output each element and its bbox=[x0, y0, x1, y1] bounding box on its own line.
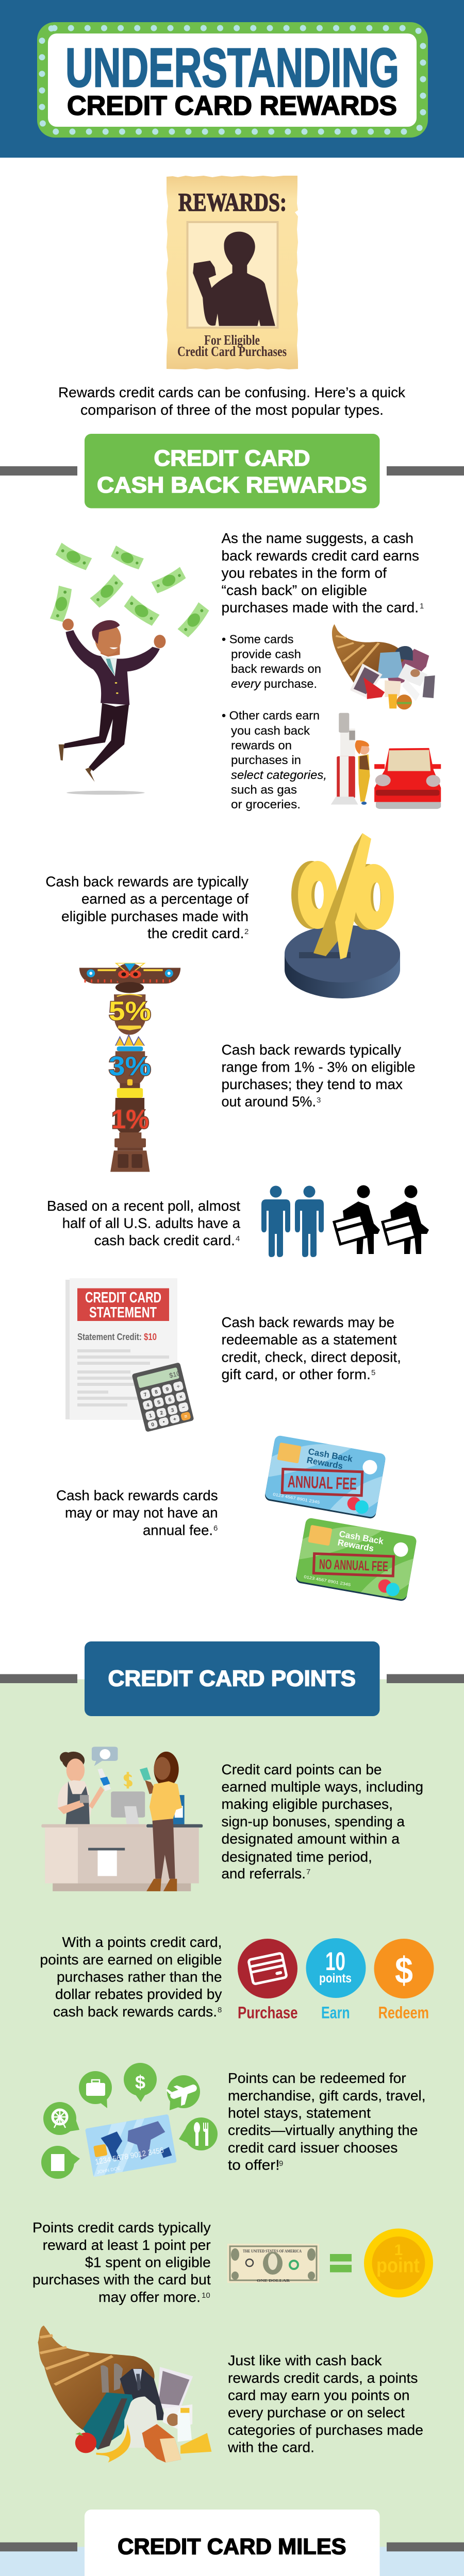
intro text bbox=[58, 384, 405, 418]
counter bbox=[41, 1824, 146, 1827]
text: points vs dollar rebates bbox=[40, 1934, 222, 2020]
calculator: 9 bbox=[165, 1386, 170, 1393]
icon: one point coin bbox=[364, 2229, 433, 2298]
header band bbox=[0, 0, 464, 158]
text: recent poll: half of all U.S. adults have a bbox=[62, 1215, 241, 1231]
icon: woman pumping gas into red car bbox=[331, 713, 441, 809]
section banner: miles: CREDIT CARD MILES bbox=[118, 2534, 346, 2560]
earn step: points bbox=[319, 1971, 352, 1986]
calculator: 7 bbox=[143, 1392, 147, 1398]
text: cash back definition: you rebates in the form of bbox=[222, 565, 387, 581]
panel: credit card points background bbox=[0, 1680, 464, 2547]
calculator: 5 bbox=[157, 1400, 161, 1406]
text: earning points: designated amount within a bbox=[222, 1831, 400, 1847]
text: points vs dollar rebates: purchases rather than the bbox=[57, 1969, 222, 1985]
wanted poster bbox=[167, 176, 298, 369]
bullet: select categories: • Other cards earn bbox=[222, 709, 320, 722]
icon: purchase earn redeem points bbox=[238, 1938, 434, 2022]
world map card: JOHN DOE bbox=[96, 2165, 121, 2175]
section banner: points: CREDIT CARD POINTS bbox=[108, 1666, 356, 1691]
text: annual fee: may or may not have an bbox=[65, 1505, 218, 1521]
text: typical range: Cash back rewards typically bbox=[222, 1042, 401, 1058]
text: annual fee: 6 bbox=[213, 1524, 218, 1533]
icon: credit card statement and calculator: STATEMENT bbox=[89, 1304, 157, 1321]
text: annual fee bbox=[56, 1487, 218, 1538]
text: percentage of purchases: earned as a percentage of bbox=[81, 891, 248, 907]
icon: credit card statement and calculator: CREDIT CARD bbox=[85, 1290, 161, 1306]
wanted poster: Credit Card Purchases bbox=[177, 344, 287, 359]
calculator: 4 bbox=[146, 1402, 150, 1409]
no annual fee stamp: NO ANNUAL FEE bbox=[319, 1556, 388, 1574]
text: points per dollar: reward at least 1 point per bbox=[43, 2237, 211, 2253]
purchase step: Purchase bbox=[238, 2004, 298, 2022]
icon: green no annual fee card: 0123 4567 8901 2345 bbox=[304, 1574, 352, 1587]
bullet: select categories: purchases in bbox=[231, 753, 301, 767]
section banner: miles bbox=[0, 2510, 464, 2576]
text: recent poll: 4 bbox=[236, 1234, 240, 1243]
redeem step: Redeem bbox=[378, 2004, 429, 2022]
text: points per dollar: $1 spent on eligible bbox=[85, 2255, 211, 2270]
bubble: dining bbox=[179, 2117, 218, 2150]
icon: four people, two holding cards bbox=[261, 1185, 429, 1257]
illustration: man jumping with falling money bbox=[50, 543, 210, 795]
falling bills bbox=[50, 543, 210, 638]
icon: blue annual fee card: Rewards bbox=[306, 1455, 343, 1471]
bubble: cash bbox=[124, 2063, 157, 2102]
bullet: every purchase: every purchase. bbox=[231, 677, 317, 690]
bubble: travel bbox=[165, 2075, 201, 2110]
text: cash back definition: 1 bbox=[420, 602, 424, 611]
text: cash back definition bbox=[222, 530, 424, 616]
text: redeeming points: 9 bbox=[279, 2159, 283, 2168]
poster frame bbox=[188, 222, 277, 328]
text: redeeming points: hotel stays, statement bbox=[228, 2105, 371, 2121]
text: every purchase or categories: card may earn you points on bbox=[228, 2387, 409, 2403]
text: redeeming points: credit card issuer chooses bbox=[228, 2140, 398, 2156]
text: percentage of purchases bbox=[45, 874, 248, 941]
redeem step bbox=[374, 1939, 434, 2022]
text: cash back definition: As the name suggests, a cash bbox=[222, 530, 413, 546]
text: redeemable forms: credit, check, direct deposit, bbox=[222, 1349, 401, 1365]
totem 5%: 5% bbox=[109, 996, 151, 1026]
marquee inner panel bbox=[48, 33, 417, 127]
bullet: select categories: you cash back bbox=[231, 724, 310, 737]
text: redeeming points: merchandise, gift cards, travel, bbox=[228, 2088, 426, 2104]
text: earning points: 7 bbox=[306, 1868, 310, 1876]
icon: credit card statement and calculator bbox=[65, 1278, 194, 1432]
text: cash back definition: purchases made with the card. bbox=[222, 600, 419, 616]
icon: totem pole with percentages bbox=[79, 963, 180, 1172]
icon: equals sign bbox=[330, 2254, 352, 2272]
text: earning points: making eligible purchases, bbox=[222, 1796, 393, 1812]
calculator: + bbox=[173, 1416, 177, 1422]
icon: 3D percent sign on pedestal bbox=[285, 833, 400, 998]
text: cash back definition: back rewards credit card earns bbox=[222, 548, 419, 564]
speech bubble bbox=[92, 1747, 118, 1766]
text: typical range: range from 1% - 3% on eligible bbox=[222, 1059, 416, 1075]
text: every purchase or categories bbox=[227, 2352, 423, 2455]
text: redeemable forms: redeemable as a statement bbox=[222, 1332, 397, 1348]
text: cash back definition: “cash back” on eligible bbox=[222, 582, 367, 598]
bullet: select categories: or groceries. bbox=[231, 798, 301, 811]
world map card bbox=[85, 2114, 177, 2177]
text: points vs dollar rebates: cash back rewards cards. bbox=[53, 2004, 217, 2020]
text: recent poll: Based on a recent poll, almost bbox=[47, 1198, 240, 1214]
calculator bbox=[131, 1362, 194, 1432]
text: typical range bbox=[222, 1042, 416, 1110]
bullet: every purchase bbox=[222, 633, 321, 690]
calculator: 6 bbox=[168, 1397, 172, 1403]
cashier bbox=[60, 1752, 72, 1763]
calculator: $10 bbox=[168, 1369, 181, 1380]
world map card: 1234 5678 9012 3456 bbox=[94, 2146, 164, 2166]
person without card bbox=[261, 1186, 290, 1257]
calculator: • bbox=[162, 1419, 165, 1425]
text: points vs dollar rebates: With a points credit card, bbox=[62, 1934, 222, 1950]
statement credit line: Statement Credit: $10 bbox=[77, 1332, 157, 1342]
intro text: comparison of three of the most popular types. bbox=[80, 402, 384, 418]
text: every purchase or categories: every purchase or on select bbox=[228, 2404, 405, 2420]
totem 3%: 3% bbox=[109, 1052, 151, 1081]
icon: dollar bill: ONE DOLLAR bbox=[257, 2279, 290, 2283]
section banner: cash back: CASH BACK REWARDS bbox=[97, 472, 367, 498]
text: redeemable forms bbox=[222, 1314, 401, 1382]
poster caption: For Eligible bbox=[204, 332, 260, 348]
text: redeemable forms: Cash back rewards may be bbox=[222, 1314, 394, 1330]
text: earning points: and referrals. bbox=[222, 1866, 306, 1882]
icon: one point coin: 1 bbox=[394, 2242, 403, 2259]
text: annual fee: annual fee. bbox=[143, 1522, 213, 1538]
intro text: Rewards credit cards can be confusing. Here’s a quick bbox=[58, 384, 405, 400]
subtitle: CREDIT CARD REWARDS bbox=[67, 91, 397, 121]
icon: green no annual fee card: Rewards bbox=[337, 1537, 374, 1553]
calculator: − bbox=[181, 1404, 186, 1411]
text: typical range: purchases; they tend to max bbox=[222, 1076, 403, 1092]
text: redeeming points bbox=[228, 2070, 426, 2173]
totem 1%: 1% bbox=[111, 1105, 149, 1134]
bubble: cash: $ bbox=[135, 2072, 145, 2093]
purchase step bbox=[238, 1939, 298, 2022]
earn step bbox=[306, 1938, 366, 2022]
text: percentage of purchases: 2 bbox=[244, 927, 248, 936]
text: percentage of purchases: the credit card. bbox=[147, 925, 244, 941]
man bbox=[59, 619, 165, 795]
icon: cornucopia with goods, food bbox=[38, 2326, 211, 2463]
text: earning points bbox=[222, 1761, 423, 1882]
text: points per dollar: purchases with the card but bbox=[32, 2272, 211, 2287]
calculator: × bbox=[179, 1394, 183, 1400]
text: redeeming points: Points can be redeemed for bbox=[228, 2070, 406, 2086]
calculator: = bbox=[184, 1414, 188, 1420]
text: points per dollar: Points credit cards typically bbox=[32, 2219, 211, 2235]
bullet: select categories: select categories, bbox=[231, 768, 327, 782]
text: redeeming points: credits—virtually anything the bbox=[228, 2122, 418, 2138]
calculator: ÷ bbox=[176, 1384, 180, 1390]
bullet: select categories: rewards on bbox=[231, 739, 292, 752]
icon: credit card with redemption bubbles bbox=[41, 2063, 218, 2179]
marquee lights bbox=[42, 28, 423, 132]
icon: one point coin: point bbox=[376, 2255, 420, 2277]
redeem step: $ bbox=[395, 1950, 413, 1991]
calculator: 0 bbox=[151, 1422, 155, 1428]
icon: blue annual fee card: 0123 4567 8901 2345 bbox=[273, 1492, 321, 1505]
text: redeeming points: to offer! bbox=[228, 2157, 279, 2173]
person with card bbox=[383, 1185, 429, 1254]
calculator: 8 bbox=[154, 1389, 159, 1395]
person with card bbox=[334, 1185, 380, 1254]
text: every purchase or categories: with the card. bbox=[227, 2439, 314, 2455]
annual fee stamp: ANNUAL FEE bbox=[287, 1472, 357, 1493]
text: redeemable forms: 5 bbox=[371, 1368, 375, 1377]
bubble: attractions bbox=[43, 2102, 79, 2135]
text: typical range: 3 bbox=[317, 1096, 321, 1105]
text: points per dollar: may offer more. bbox=[98, 2289, 201, 2305]
text: earning points: sign-up bonuses, spending a bbox=[222, 1814, 405, 1829]
poster heading: REWARDS: bbox=[178, 188, 287, 216]
panel: credit card miles background bbox=[0, 2547, 464, 2576]
section banner: points bbox=[0, 1641, 464, 1716]
bullet: every purchase: back rewards on bbox=[231, 662, 321, 675]
no annual fee stamp bbox=[313, 1554, 394, 1576]
text: points per dollar: 10 bbox=[202, 2291, 210, 2300]
bullet: every purchase: provide cash bbox=[231, 648, 301, 661]
text: typical range: out around 5%. bbox=[222, 1093, 316, 1110]
customer bbox=[154, 1752, 179, 1787]
text: every purchase or categories: Just like with cash back bbox=[228, 2352, 382, 2368]
annual fee stamp bbox=[282, 1469, 362, 1496]
calculator: 1 bbox=[148, 1413, 153, 1419]
earn step: Earn bbox=[321, 2004, 350, 2022]
icon: blue annual fee card: Cash Back bbox=[307, 1447, 354, 1464]
icon: green no annual fee card bbox=[295, 1517, 417, 1602]
icon: dollar bill bbox=[227, 2244, 319, 2283]
text: earning points: designated time period, bbox=[222, 1849, 372, 1865]
icon: blue annual fee card bbox=[264, 1435, 386, 1519]
bubble: merchandise bbox=[79, 2071, 112, 2108]
icon: cornucopia with goods bbox=[332, 624, 435, 709]
bullet: select categories bbox=[222, 709, 327, 811]
illustration: checkout counter with cashier and customer bbox=[41, 1747, 203, 1891]
section banner: cash back: CREDIT CARD bbox=[154, 446, 310, 471]
earn step: 10 bbox=[325, 1947, 345, 1976]
bubble: hotel bbox=[41, 2146, 80, 2179]
text: recent poll bbox=[47, 1198, 241, 1248]
text: points vs dollar rebates: dollar rebates provided by bbox=[55, 1986, 222, 2002]
calculator: 2 bbox=[159, 1410, 164, 1416]
statement header bbox=[77, 1288, 169, 1321]
section banner: cash back bbox=[0, 434, 464, 508]
text: percentage of purchases: Cash back rewards are typically bbox=[45, 874, 248, 889]
marquee frame bbox=[37, 22, 428, 138]
text: points vs dollar rebates: points are earned on eligible bbox=[40, 1952, 222, 1968]
icon: green no annual fee card: Cash Back bbox=[338, 1529, 385, 1547]
text: points vs dollar rebates: 8 bbox=[218, 2006, 222, 2014]
icon: dollar bill: THE UNITED STATES OF AMERICA bbox=[243, 2249, 302, 2253]
text: recent poll: cash back credit card. bbox=[94, 1232, 235, 1248]
bullet: every purchase: • Some cards bbox=[222, 633, 294, 646]
calculator: 3 bbox=[171, 1408, 175, 1414]
text: redeemable forms: gift card, or other form. bbox=[222, 1366, 371, 1382]
text: every purchase or categories: rewards credit cards, a points bbox=[228, 2370, 418, 2386]
silhouette holding card bbox=[193, 232, 275, 326]
text: points per dollar bbox=[32, 2219, 211, 2305]
text: percentage of purchases: eligible purchases made with bbox=[61, 908, 248, 924]
text: every purchase or categories: categories of purchases made bbox=[228, 2422, 423, 2438]
text: earning points: earned multiple ways, including bbox=[222, 1779, 423, 1795]
bullet: select categories: such as gas bbox=[231, 783, 297, 796]
text: annual fee: Cash back rewards cards bbox=[56, 1487, 218, 1503]
text: earning points: Credit card points can be bbox=[222, 1761, 382, 1777]
person without card bbox=[295, 1186, 324, 1257]
